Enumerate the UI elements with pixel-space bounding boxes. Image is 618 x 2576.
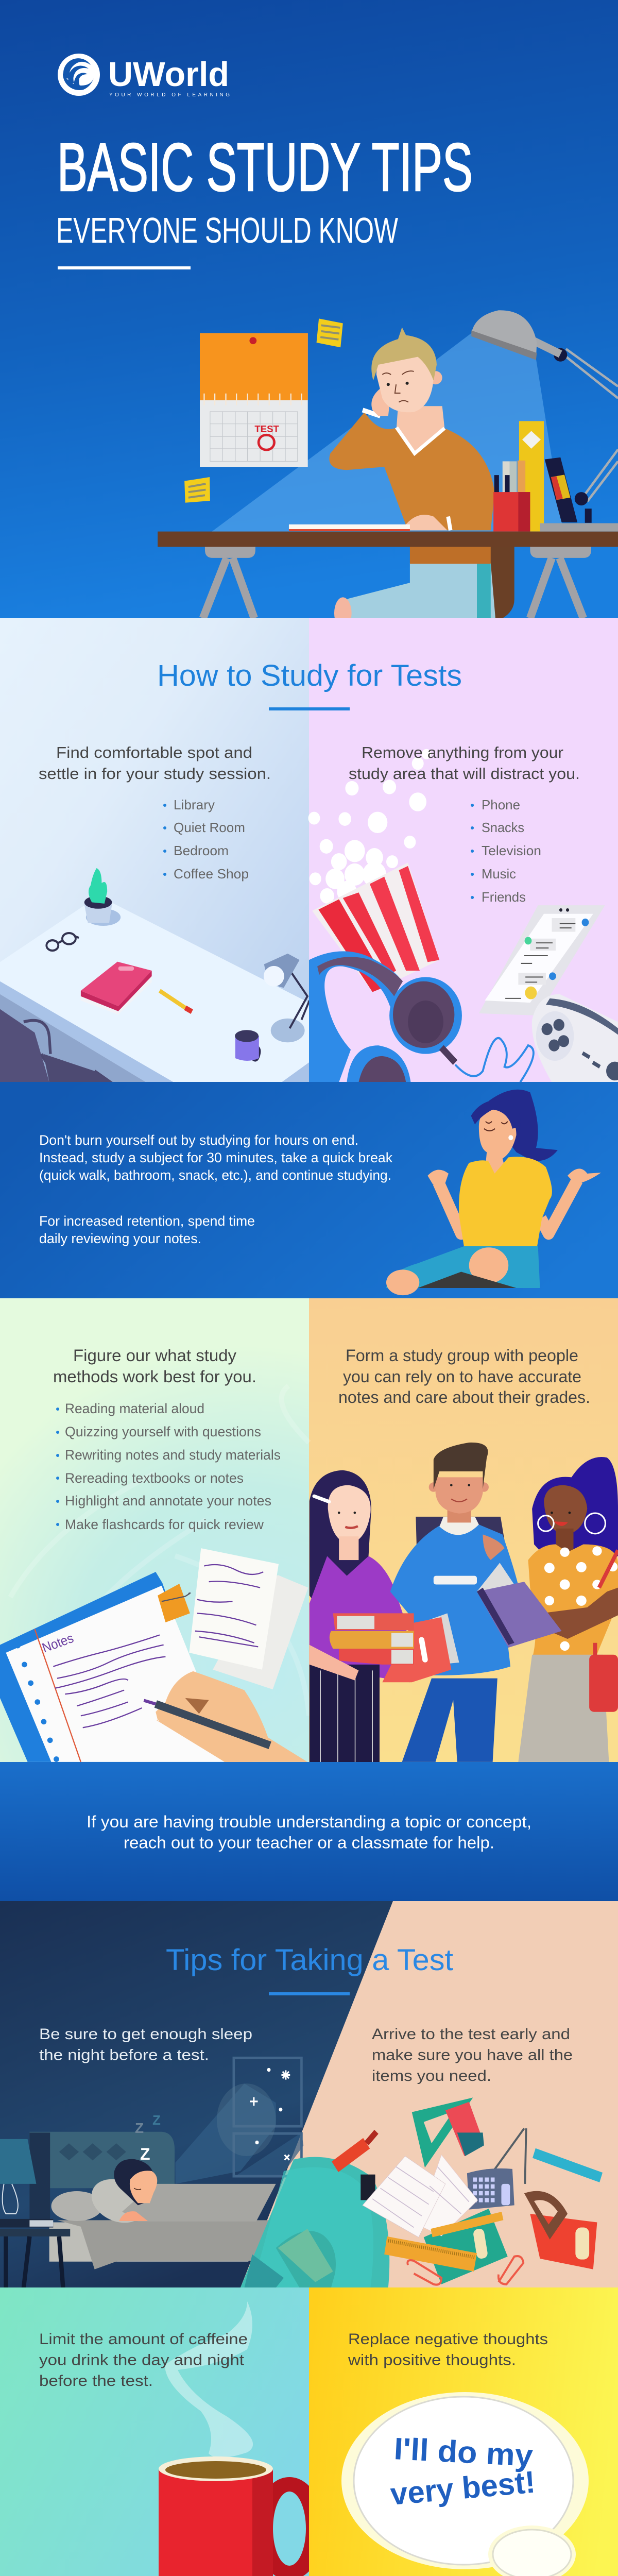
list: study methods: Highlight and annotate your notes xyxy=(65,1493,271,1509)
text block: positive thoughts xyxy=(348,2331,548,2369)
list: study locations: Coffee Shop xyxy=(174,866,249,882)
icon: purple mug xyxy=(235,1030,260,1061)
arms xyxy=(438,1180,577,1233)
icon: glasses xyxy=(46,933,79,951)
icon: red coffee mug xyxy=(159,2456,324,2576)
text block: breaks advice: For increased retention, spend time xyxy=(39,1213,255,1229)
table legs xyxy=(203,546,591,618)
swirl strokes xyxy=(10,1386,309,1716)
panel: caffeine background xyxy=(0,2287,309,2576)
binder clip xyxy=(158,1584,190,1622)
list: study methods xyxy=(58,1401,281,1532)
text block: remove distractions: Remove anything from your xyxy=(362,743,563,761)
illustration: three students xyxy=(310,1443,618,1763)
icon: set square xyxy=(412,2097,473,2167)
icon: eraser xyxy=(445,2102,484,2156)
icon: pencil xyxy=(160,991,192,1012)
icon: game controller xyxy=(532,994,618,1082)
icon: sticky note xyxy=(317,318,343,347)
list: study locations: Bedroom xyxy=(174,843,229,858)
text block: find comfortable spot xyxy=(39,743,271,783)
icon: sleeping Zs: Z xyxy=(140,2145,150,2163)
icon: yellow binder xyxy=(519,421,544,532)
icon: backpack xyxy=(241,2157,389,2287)
heading: How to Study for Tests xyxy=(157,659,462,710)
writing hand xyxy=(144,1671,307,1762)
illustration: distractions xyxy=(308,749,618,1082)
text block: ask for help xyxy=(87,1812,531,1852)
panel: test day peach background xyxy=(0,1901,618,2287)
list: distractions: Television xyxy=(482,843,541,858)
panel: study spot background xyxy=(0,618,309,1082)
illustration: student at desk xyxy=(158,310,618,629)
text block: figure out methods xyxy=(53,1346,256,1386)
text block: study group: Form a study group with people xyxy=(346,1346,578,1365)
illustration: notes and writing hand xyxy=(0,1548,308,1762)
text block: breaks advice: Don't burn yourself out by studying for hours on end. xyxy=(39,1132,358,1148)
list: distractions: Phone xyxy=(482,797,520,812)
illustration: sleeping student xyxy=(0,2058,303,2287)
list: distractions xyxy=(472,797,541,905)
list: distractions: Friends xyxy=(482,889,526,905)
list: distractions: Snacks xyxy=(482,820,524,835)
title: EVERYONE SHOULD KNOW xyxy=(56,210,398,250)
panel: study methods background xyxy=(0,1298,309,1762)
text block: remove distractions: study area that will distract you. xyxy=(349,765,580,783)
student: girl with purple top xyxy=(310,1470,410,1763)
icon: ruler xyxy=(384,2236,477,2272)
text block: arrive early xyxy=(372,2026,573,2084)
text block: caffeine: you drink the day and night xyxy=(39,2351,245,2369)
icon: orange pencil xyxy=(432,2216,503,2233)
icon: wall calendar xyxy=(200,333,308,467)
heading: Tips for Taking a Test xyxy=(166,1943,453,1995)
text block: study group: you can rely on to have accurate xyxy=(343,1367,581,1386)
text block: ask for help: If you are having trouble understanding a topic or concept, xyxy=(87,1812,531,1831)
panel: breaks background xyxy=(0,1082,618,1298)
text block: sleep: the night before a test. xyxy=(39,2046,209,2064)
icon: red notebook xyxy=(530,2214,597,2269)
list: study locations xyxy=(165,797,249,882)
light beam xyxy=(211,333,563,532)
loose papers xyxy=(189,1548,308,1689)
icon: stack of books xyxy=(330,1613,459,1682)
list: study methods: Make flashcards for quick review xyxy=(65,1517,264,1532)
icon: sleeping Zs: Z xyxy=(135,2120,144,2136)
desk lamp xyxy=(471,310,618,532)
icon: potted plant xyxy=(84,868,121,926)
icon: calculator xyxy=(467,2168,514,2210)
icon: protractor xyxy=(524,2191,568,2240)
shorts and legs xyxy=(386,1246,540,1288)
open book xyxy=(289,524,410,531)
icon: blue pencil xyxy=(534,2153,601,2177)
icon: sleeping Zs xyxy=(135,2112,161,2163)
illustration: meditating woman xyxy=(386,1090,601,1295)
icon: green notebook xyxy=(424,2209,508,2284)
icon: sleeping Zs: Z xyxy=(152,2112,161,2128)
blue notebook xyxy=(0,1572,225,1762)
icon: pen cup xyxy=(493,461,530,532)
student xyxy=(329,327,514,629)
text block: ask for help: reach out to your teacher or a classmate for help. xyxy=(124,1833,494,1852)
yellow top xyxy=(459,1157,552,1248)
thought bubble xyxy=(341,2392,589,2576)
text block: positive thoughts: Replace negative thoughts xyxy=(348,2331,548,2348)
text block: figure out methods: Figure our what study xyxy=(73,1346,236,1365)
text block: caffeine xyxy=(39,2331,248,2389)
text block: breaks advice: daily reviewing your notes. xyxy=(39,1231,201,1246)
icon: purple book xyxy=(477,1563,562,1648)
icon: headphones xyxy=(309,951,534,1082)
illustration: study desk xyxy=(0,868,310,1082)
icon: phone xyxy=(479,905,605,1015)
icon: small desk lamp xyxy=(264,954,310,1042)
heading: How to Study for Tests: How to Study for Tests xyxy=(157,659,462,692)
text block: arrive early: make sure you have all the xyxy=(372,2046,573,2064)
text block: sleep: Be sure to get enough sleep xyxy=(39,2026,252,2043)
icon: sticky note xyxy=(184,477,210,503)
icon: red highlighter xyxy=(335,2132,376,2167)
list: study locations: Library xyxy=(174,797,215,812)
icon: compass xyxy=(492,2128,526,2184)
icon: loose sheets xyxy=(363,2155,478,2238)
text block: positive thoughts: with positive thoughts. xyxy=(348,2351,516,2369)
text block: find comfortable spot: Find comfortable spot and xyxy=(56,743,252,761)
icon: sharpener xyxy=(360,2175,375,2200)
illustration: notes and writing hand: Notes xyxy=(40,1630,76,1656)
text block: figure out methods: methods work best for you. xyxy=(53,1367,256,1386)
logo: UWorld header: UWorld xyxy=(108,55,229,94)
list: study methods: Rereading textbooks or notes xyxy=(65,1470,244,1486)
text block: remove distractions xyxy=(349,743,580,783)
text block: arrive early: Arrive to the test early and xyxy=(372,2026,570,2043)
text block: arrive early: items you need. xyxy=(372,2067,491,2084)
steam xyxy=(165,2301,253,2458)
text block: breaks advice xyxy=(39,1132,392,1246)
list: study methods: Reading material aloud xyxy=(65,1401,204,1416)
logo: UWorld header xyxy=(58,54,230,98)
text block: sleep xyxy=(39,2026,252,2064)
student: girl with polka dots xyxy=(518,1457,618,1762)
list: distractions: Music xyxy=(482,866,516,882)
text block: breaks advice: (quick walk, bathroom, snack, etc.), and continue studying. xyxy=(39,1167,391,1183)
illustration: test supplies xyxy=(241,2097,601,2287)
panel: hero background xyxy=(0,0,618,618)
panel: positive thoughts background xyxy=(309,2287,618,2576)
icon: pink notebook xyxy=(81,962,152,1014)
panel: night background xyxy=(0,1901,393,2287)
list: study methods: Rewriting notes and study materials xyxy=(65,1447,281,1463)
thought bubble: I'll do my xyxy=(393,2431,534,2473)
icon: leaning books xyxy=(545,457,577,522)
icon: office chair xyxy=(0,1009,112,1082)
panel: study group background xyxy=(309,1298,618,1762)
icon: wall calendar: TEST xyxy=(254,423,280,434)
table top xyxy=(158,532,618,547)
title xyxy=(56,129,473,269)
thought bubble: very best! xyxy=(389,2465,537,2512)
text block: breaks advice: Instead, study a subject for 30 minutes, take a quick break xyxy=(39,1150,392,1165)
text block: caffeine: before the test. xyxy=(39,2372,153,2389)
list: study locations: Quiet Room xyxy=(174,820,245,835)
text block: study group: notes and care about their grades. xyxy=(338,1388,590,1406)
icon: popcorn xyxy=(308,749,439,992)
text block: find comfortable spot: settle in for your study session. xyxy=(39,765,271,783)
text block: caffeine: Limit the amount of caffeine xyxy=(39,2331,248,2348)
panel: ask for help background xyxy=(0,1762,618,1901)
list: study methods: Quizzing yourself with questions xyxy=(65,1424,261,1439)
text block: study group xyxy=(338,1346,590,1406)
panel: distractions background xyxy=(309,618,618,1082)
student: boy with backpack xyxy=(390,1443,522,1762)
logo: UWorld header: YOUR WORLD OF LEARNING xyxy=(109,92,230,98)
heading: Tips for Taking a Test: Tips for Taking a Test xyxy=(166,1943,453,1977)
icon: paper clips xyxy=(407,2256,523,2285)
